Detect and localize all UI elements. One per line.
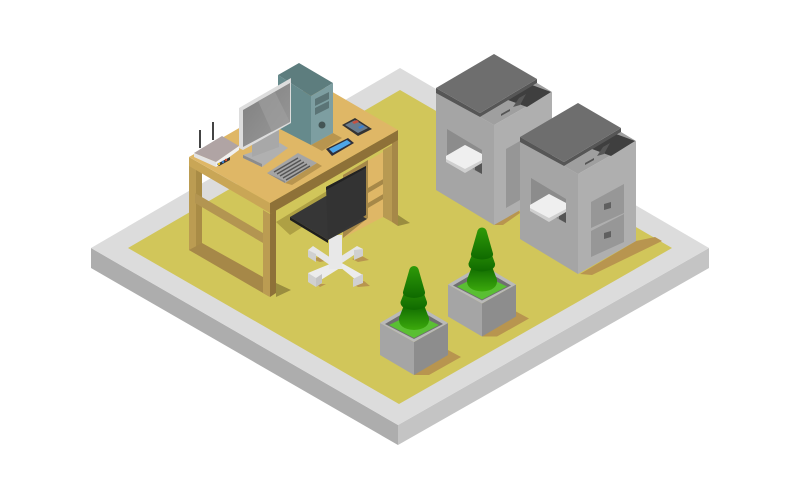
plant right — [448, 228, 529, 336]
router — [194, 122, 239, 167]
monitor — [239, 78, 291, 167]
copier machine back — [436, 54, 552, 225]
isometric floor platform — [91, 68, 709, 445]
calculator phone — [342, 118, 372, 136]
tree left — [399, 266, 429, 330]
tablet — [326, 138, 354, 156]
tree right — [467, 228, 497, 292]
keyboard — [267, 153, 322, 185]
desk — [189, 83, 410, 297]
computer tower — [278, 63, 342, 151]
office chair — [290, 166, 370, 287]
plant left — [380, 266, 461, 375]
copier machine front — [520, 103, 662, 275]
